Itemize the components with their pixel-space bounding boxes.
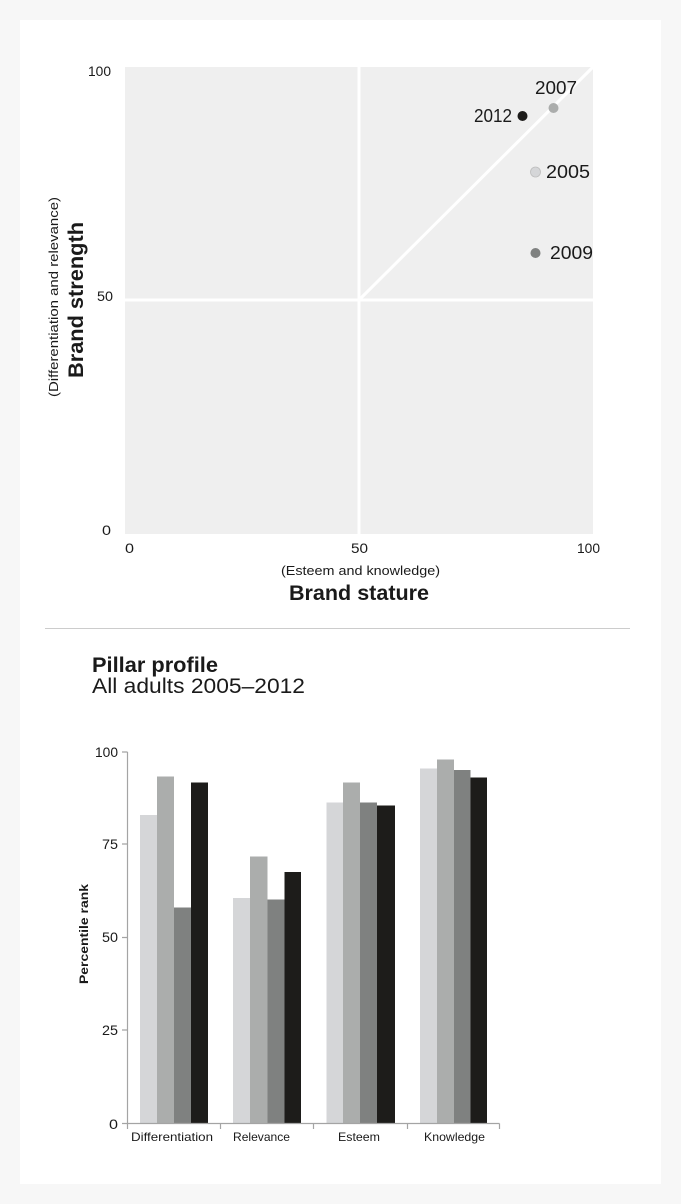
y axis labels: 0 [109,1116,118,1132]
category labels: Knowledge [424,1130,485,1144]
category labels: Relevance [233,1130,290,1144]
axes [122,752,500,1129]
y axis ticks: 0 [102,522,111,538]
category labels [131,1130,485,1144]
bars: relevance [233,856,301,1123]
x axis title: Brand stature [289,582,429,605]
x axis subtitle: (Esteem and knowledge) [281,563,440,578]
bar chart: pillar profile [77,744,500,1144]
bars: differentiation [140,776,208,1123]
data point: 2012: 2012 [474,106,512,126]
y axis title: Brand strength [65,222,88,378]
data point: 2009: 2009 [550,243,593,263]
y axis labels: 75 [102,836,118,852]
plot area [125,67,593,534]
scatter chart: brand strength vs stature [46,63,600,605]
y axis labels [95,744,118,1132]
heading: pillar profile: All adults 2005–2012 [92,675,305,698]
y axis labels: 50 [102,929,118,945]
y axis labels: 25 [102,1022,118,1038]
data point: 2007 [535,78,577,113]
category labels: Esteem [338,1130,380,1144]
y axis ticks [88,63,113,538]
heading: pillar profile: Pillar profile [92,654,218,677]
y axis subtitle: (Differentiation and relevance) [46,197,61,397]
y axis ticks: 50 [97,288,113,304]
heading: pillar profile [92,654,305,698]
data point: 2009 [530,243,593,263]
x axis ticks: 100 [577,540,600,556]
bars: esteem [326,782,395,1123]
y axis ticks: 100 [88,63,111,79]
data point: 2005 [530,162,590,182]
category labels: Differentiation [131,1130,213,1144]
bars: knowledge [420,760,487,1123]
y axis title: Percentile rank [77,884,91,984]
x axis ticks: 50 [351,540,368,556]
y axis labels: 100 [95,744,118,760]
x axis ticks: 0 [125,540,134,556]
data point: 2007: 2007 [535,78,577,98]
data point: 2005: 2005 [546,162,590,182]
x axis ticks [125,540,600,556]
